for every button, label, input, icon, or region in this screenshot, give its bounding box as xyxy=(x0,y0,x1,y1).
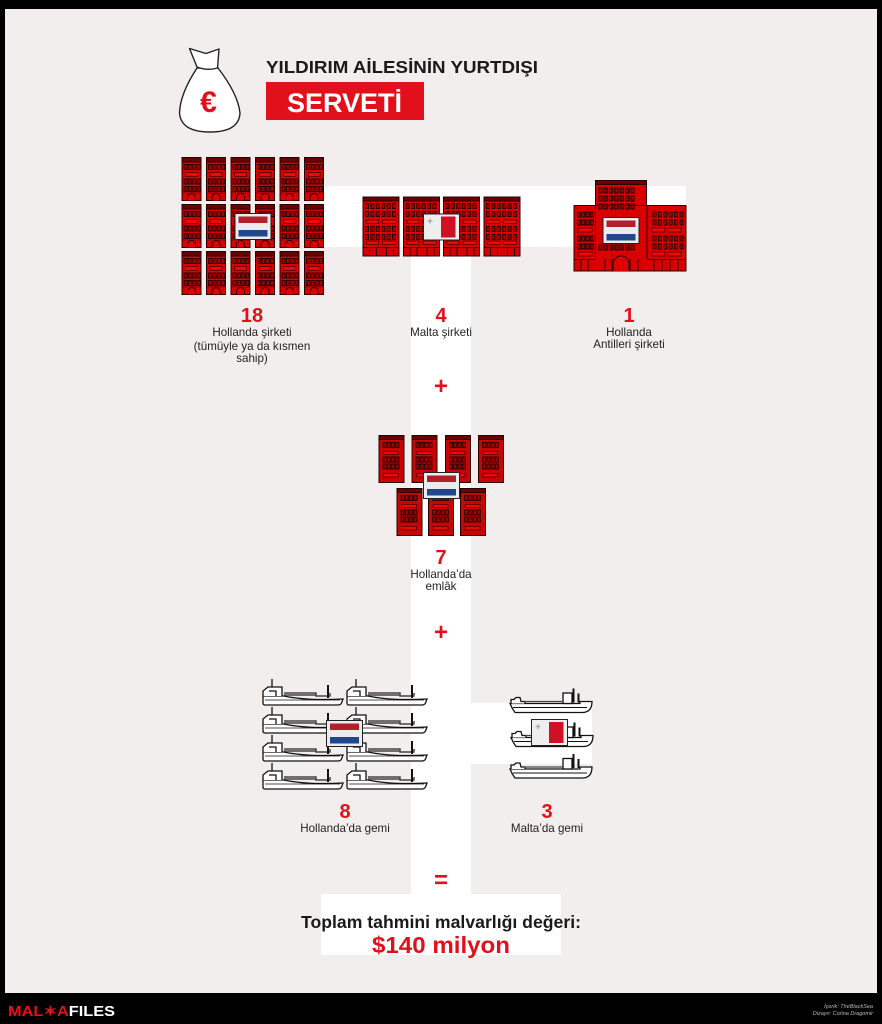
icon: 18 Dutch company buildings xyxy=(182,158,324,294)
plus sign: + xyxy=(434,619,448,646)
credits: İçerik: TheBlackSea xyxy=(824,1003,873,1010)
label: 1 Dutch Antilles company: 1 xyxy=(623,305,635,327)
label: 3 ships: 3 xyxy=(541,801,553,823)
title xyxy=(266,57,538,120)
label: 1 Dutch Antilles company xyxy=(593,305,665,351)
title: SERVETİ xyxy=(287,88,402,118)
icon: 7 Dutch real estate buildings xyxy=(379,436,504,536)
credits: Dizayn: Corina Dragomir xyxy=(813,1011,874,1017)
label: 4 Malta companies xyxy=(410,305,472,339)
label: 7 real estate xyxy=(410,547,472,593)
label: 1 Dutch Antilles company: Hollanda xyxy=(606,326,652,339)
title: YILDIRIM AİLESİNİN YURTDIŞI xyxy=(266,57,538,77)
label: 4 Malta companies: 4 xyxy=(435,305,447,327)
icon: 8 Dutch ships xyxy=(263,679,427,789)
label: 7 real estate: emlâk xyxy=(426,580,457,593)
label: 7 real estate: 7 xyxy=(435,547,447,569)
total value xyxy=(301,912,581,958)
label: 18 Dutch companies: Hollanda şirketi xyxy=(212,326,292,339)
label: 7 real estate: Hollanda’da xyxy=(410,568,472,581)
label: 18 Dutch companies: sahip) xyxy=(236,352,268,365)
label: 8 ships: 8 xyxy=(339,801,351,823)
label: 8 ships: Hollanda’da gemi xyxy=(300,822,390,835)
icon: money bag xyxy=(180,48,240,132)
plus sign: + xyxy=(434,373,448,400)
label: 4 Malta companies: Malta şirketi xyxy=(410,326,472,339)
total value: $140 milyon xyxy=(372,932,510,958)
equals sign: = xyxy=(434,867,448,894)
label: 18 Dutch companies: (tümüyle ya da kısmen xyxy=(194,340,310,353)
logo: Malta Files: MAL✶A FILES xyxy=(8,1004,115,1020)
icon: money bag: € xyxy=(200,86,217,119)
total value: Toplam tahmini malvarlığı değeri: xyxy=(301,912,581,932)
label: 3 ships: Malta’da gemi xyxy=(511,822,583,835)
white connector band xyxy=(321,186,686,955)
icon: Dutch Antilles company building xyxy=(574,180,686,271)
credits xyxy=(813,1003,874,1017)
label: 18 Dutch companies: 18 xyxy=(241,305,263,327)
label: 3 ships xyxy=(511,801,583,835)
label: 8 ships xyxy=(300,801,390,835)
label: 18 Dutch companies xyxy=(194,305,310,365)
label: 1 Dutch Antilles company: Antilleri şirketi xyxy=(593,338,665,351)
icon: 3 Malta ships xyxy=(510,688,593,778)
icon: 4 Malta company buildings xyxy=(363,197,520,256)
